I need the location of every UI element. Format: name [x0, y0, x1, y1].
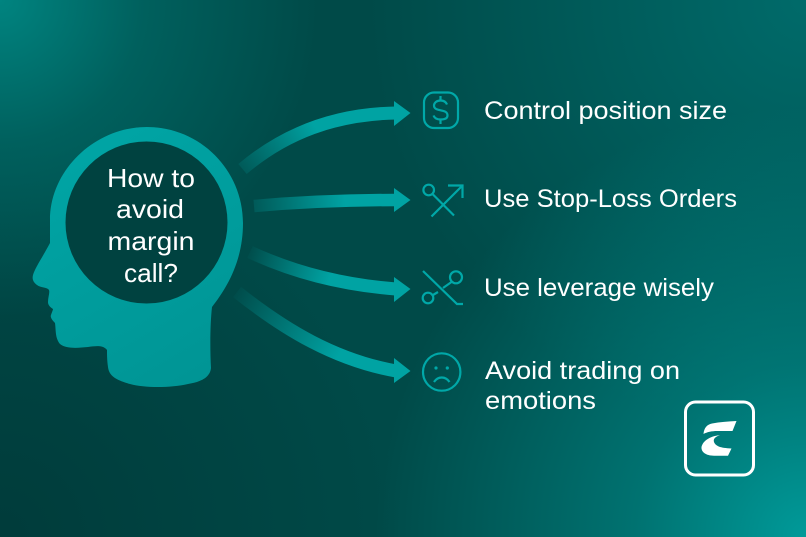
head question text: margin: [108, 226, 194, 256]
label: use leverage wisely: Use leverage wisely: [484, 274, 715, 302]
head question text: call?: [124, 258, 178, 288]
logo badge: [686, 402, 754, 475]
head question text: [107, 163, 195, 288]
label: avoid trading on emotions: emotions: [485, 387, 596, 415]
arrow 3: [250, 252, 410, 302]
label: use stop-loss orders: Use Stop-Loss Orders: [484, 185, 737, 213]
head question text: How to: [107, 163, 195, 193]
head with question: [33, 127, 243, 387]
head silhouette: [33, 127, 243, 387]
icon: sad face: [423, 353, 460, 391]
arrow 2: [254, 188, 410, 212]
icon: dollar: [424, 92, 458, 128]
label: avoid trading on emotions: Avoid trading on: [485, 357, 680, 385]
head question text: avoid: [116, 194, 184, 224]
icon: stop-loss crossing arrows: [423, 185, 462, 216]
label: avoid trading on emotions: [485, 357, 680, 415]
label: control position size: Control position size: [484, 97, 727, 125]
arrow 4: [237, 292, 410, 383]
arrow 1: [242, 101, 410, 169]
icon: leverage crossing lines: [423, 271, 463, 304]
head inner circle: [66, 142, 228, 304]
